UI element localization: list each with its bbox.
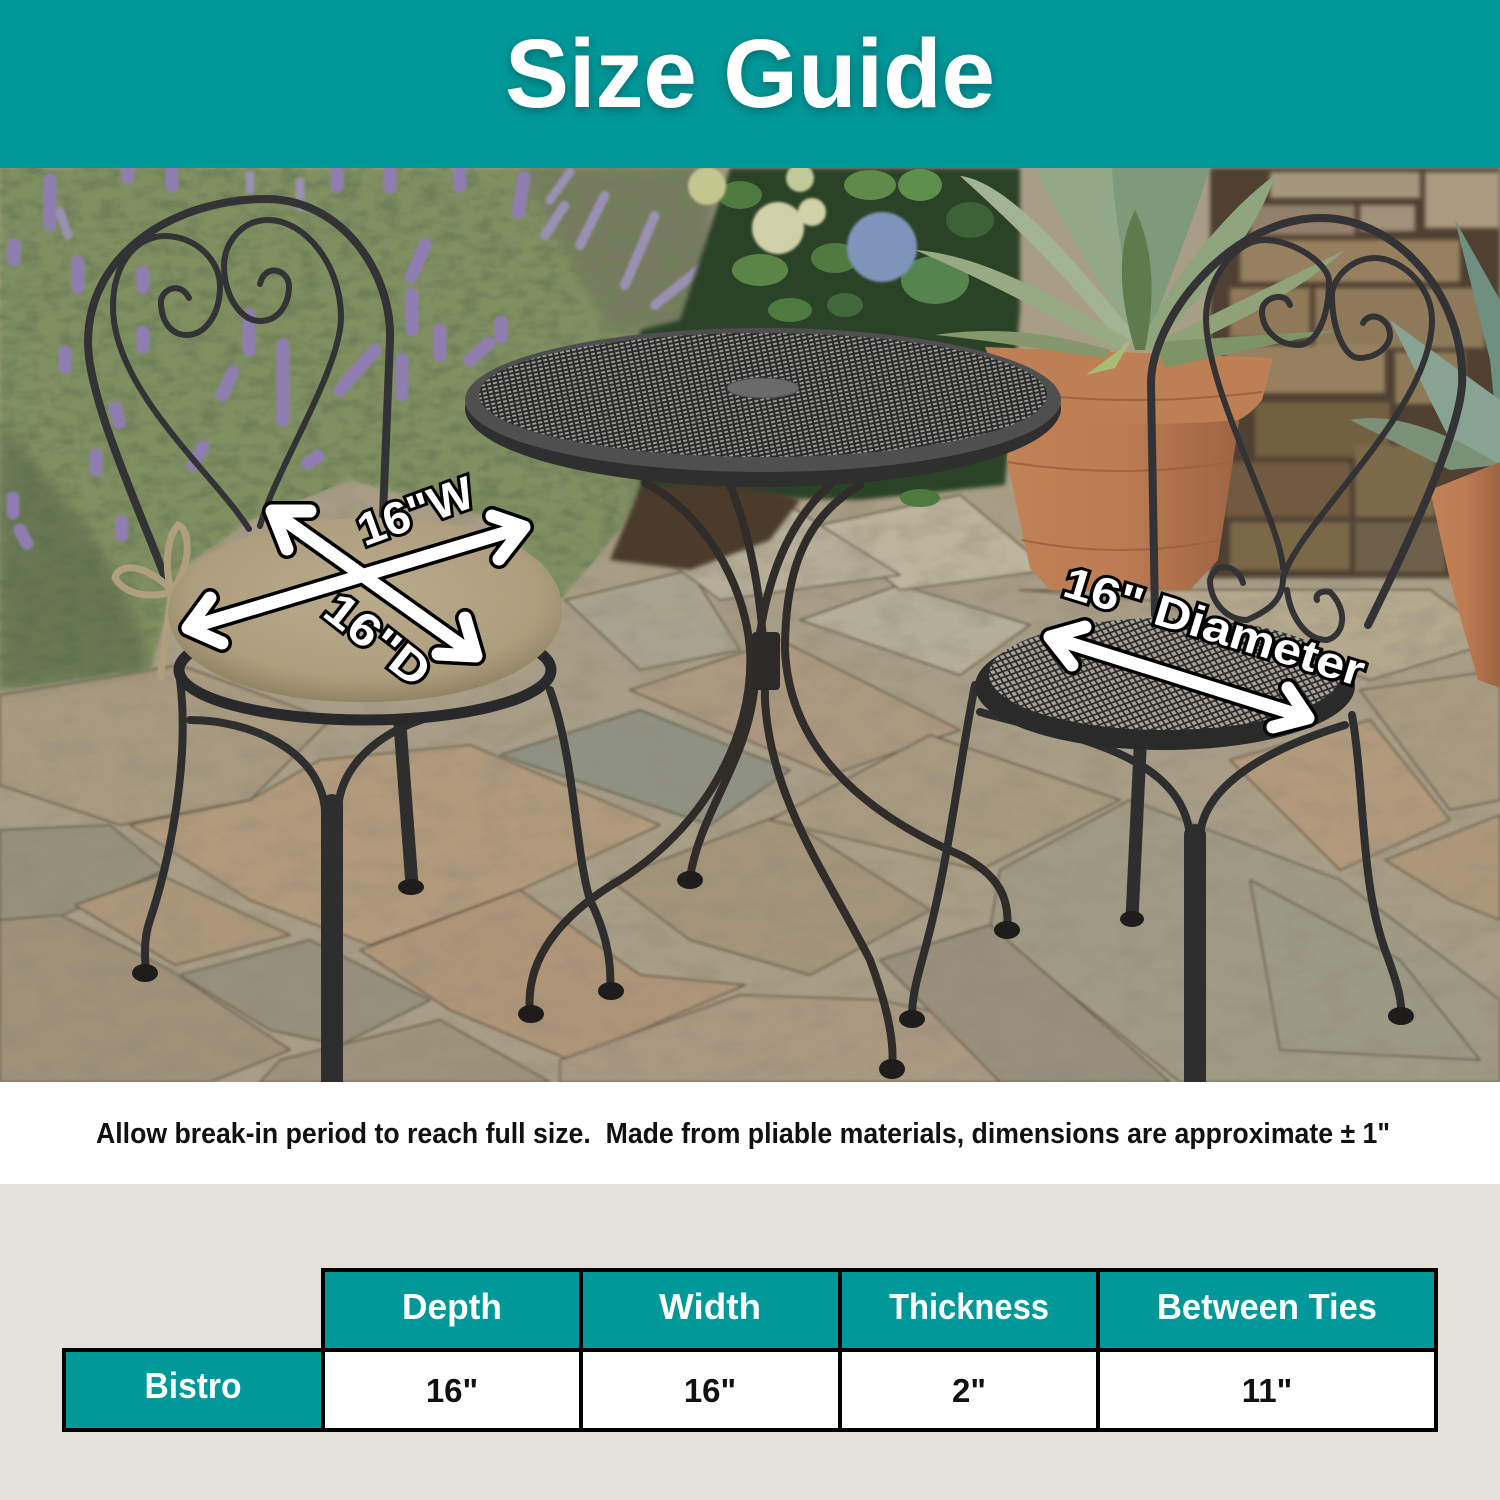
label: 16" Diameter: 16" Diameter [1058, 558, 1371, 696]
label: 16"W: 16"W [350, 466, 481, 556]
right terracotta pot and plant [1350, 220, 1500, 688]
note band [0, 1082, 1500, 1184]
agave in terracotta pot [915, 168, 1345, 590]
chair mesh seat [975, 618, 1355, 750]
table row: Bistro: 2" [952, 1372, 986, 1409]
break-in note: Allow break-in period to reach full size. Made from pliable materials, dimensions are approximate ± 1" [96, 1118, 1390, 1150]
dimension arrows: cushion width and depth [188, 466, 524, 697]
table header cells: Width [659, 1286, 761, 1327]
table row: Bistro [64, 1350, 1436, 1430]
table top [465, 404, 1061, 487]
stone wall [1210, 168, 1500, 578]
chair feet [899, 911, 1414, 1028]
table header cells [322, 1270, 1436, 1350]
chair legs [145, 680, 610, 1082]
photo: bistro set on patio [0, 164, 1500, 1082]
size table [64, 1270, 1436, 1430]
table row: Bistro: 16" [684, 1372, 736, 1409]
chair seat rim [174, 650, 556, 726]
lavender garden [0, 168, 735, 698]
round mesh table [465, 328, 1061, 1079]
chair feet [132, 879, 624, 1000]
lavender flower spikes [13, 172, 735, 545]
table row: Bistro: 16" [426, 1372, 478, 1409]
burlap ties [115, 525, 187, 680]
chair legs [912, 685, 1401, 1082]
table row: Bistro: Bistro [144, 1365, 242, 1406]
table header cells: Depth [402, 1286, 502, 1327]
left bistro chair [88, 199, 624, 1082]
hydrangea bush and mulch [610, 164, 1020, 570]
label: 16"D: 16"D [315, 582, 441, 697]
chair back [88, 199, 390, 585]
table row: Bistro: 11" [1242, 1372, 1292, 1409]
patio paving [0, 168, 1500, 1082]
header banner [0, 0, 1500, 168]
dimension arrow: seat diameter [1050, 558, 1371, 727]
chair back [1151, 218, 1462, 640]
right bistro chair [899, 218, 1462, 1082]
table feet [518, 871, 1020, 1079]
table header cells: Thickness [889, 1286, 1049, 1327]
burlap cushion [168, 518, 562, 702]
title: Size Guide [505, 19, 995, 128]
table header cells: Between Ties [1157, 1286, 1377, 1327]
table legs [530, 483, 1007, 1068]
